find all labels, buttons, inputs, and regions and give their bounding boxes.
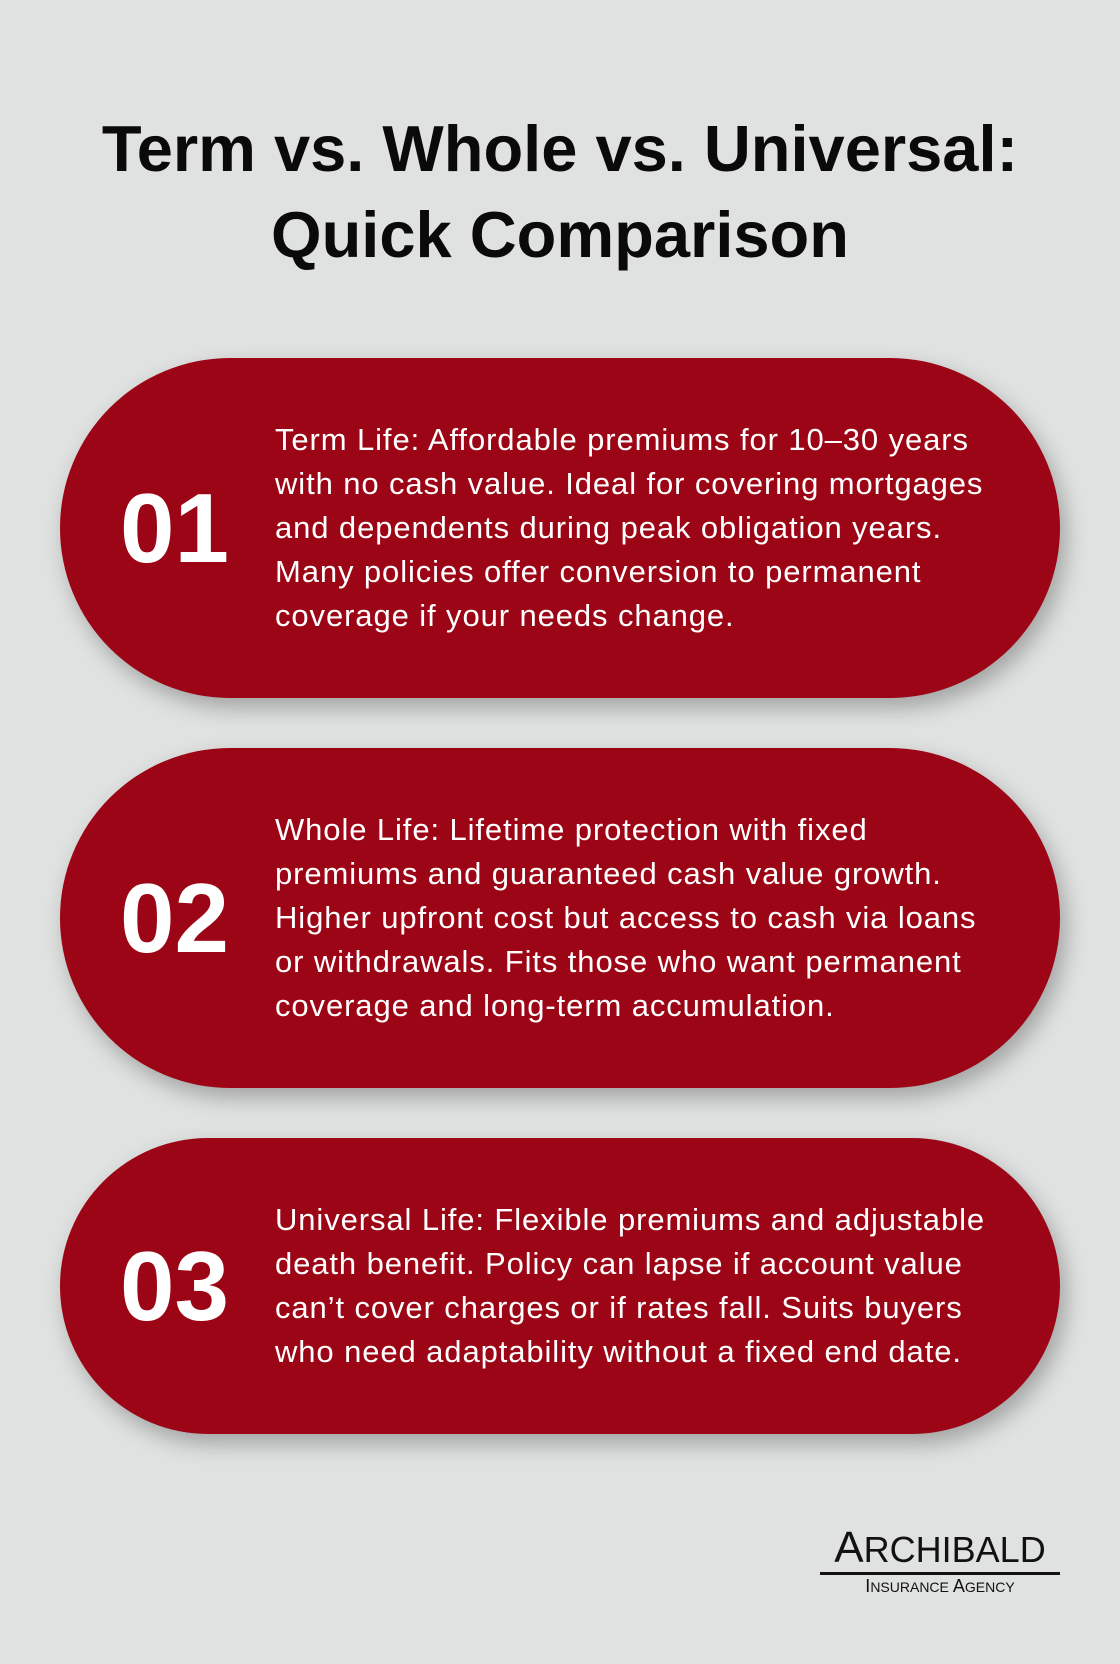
text: universal life: death benefit. Policy can lapse if account value <box>275 1246 963 1281</box>
title: Term vs. Whole vs. Universal: <box>102 112 1018 185</box>
number 03: 03 <box>120 1230 229 1340</box>
number 02: 02 <box>120 862 229 972</box>
text: whole life <box>275 812 976 1023</box>
logo <box>820 1523 1060 1596</box>
text: universal life <box>275 1202 985 1369</box>
text: whole life: Higher upfront cost but access to cash via loans <box>275 900 976 935</box>
text: term life: with no cash value. Ideal for covering mortgages <box>275 466 983 501</box>
panel: universal life <box>60 1138 1060 1434</box>
title: Quick Comparison <box>271 198 849 271</box>
text: whole life: Whole Life: Lifetime protection with fixed <box>275 812 868 847</box>
title <box>102 112 1018 271</box>
text: whole life: or withdrawals. Fits those who want permanent <box>275 944 962 979</box>
logo: INSURANCE AGENCY <box>865 1576 1015 1596</box>
text: universal life: can’t cover charges or if rates fall. Suits buyers <box>275 1290 963 1325</box>
text: whole life: coverage and long-term accumulation. <box>275 988 835 1023</box>
text: universal life: Universal Life: Flexible premiums and adjustable <box>275 1202 985 1237</box>
panel: term life <box>60 358 1060 698</box>
number 01: 01 <box>120 472 229 582</box>
logo: ARCHIBALD <box>834 1523 1046 1572</box>
text: term life: Term Life: Affordable premiums for 10–30 years <box>275 422 969 457</box>
panel: whole life <box>60 748 1060 1088</box>
text: term life: and dependents during peak obligation years. <box>275 510 942 545</box>
text: term life <box>275 422 983 633</box>
text: whole life: premiums and guaranteed cash value growth. <box>275 856 942 891</box>
text: term life: coverage if your needs change. <box>275 598 735 633</box>
text: universal life: who need adaptability without a fixed end date. <box>275 1334 962 1369</box>
text: term life: Many policies offer conversion to permanent <box>275 554 921 589</box>
